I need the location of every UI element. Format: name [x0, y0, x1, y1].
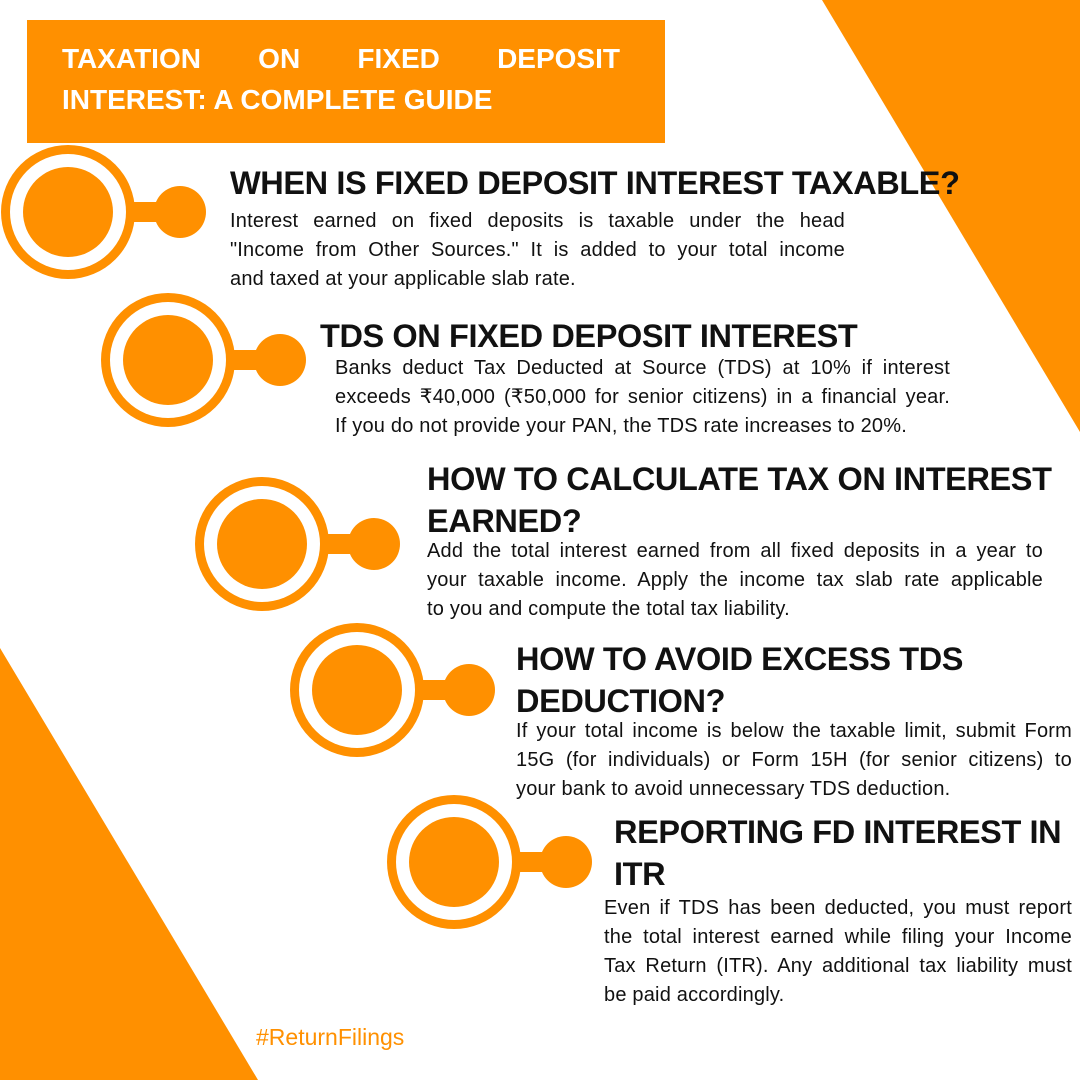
- section 3: [427, 461, 1052, 620]
- section 3: HOW TO CALCULATE TAX ON INTEREST: [427, 461, 1052, 497]
- section 2: exceeds ₹40,000 (₹50,000 for senior citizens) in a financial year.: [335, 386, 950, 408]
- section 4: your bank to avoid unnecessary TDS deduction.: [516, 778, 950, 800]
- section 5: ITR: [614, 856, 665, 892]
- section 5: REPORTING FD INTEREST IN: [614, 814, 1061, 850]
- hashtag: #ReturnFilings: [256, 1024, 404, 1050]
- section 5: [604, 814, 1072, 1006]
- section 1: "Income from Other Sources." It is added to your total income: [230, 239, 845, 261]
- section 3: to you and compute the total tax liability.: [427, 598, 790, 620]
- section 5: Even if TDS has been deducted, you must report: [604, 897, 1072, 919]
- section 2: If you do not provide your PAN, the TDS rate increases to 20%.: [335, 415, 907, 437]
- icon 2: [101, 293, 306, 427]
- section 1: and taxed at your applicable slab rate.: [230, 268, 576, 290]
- section 1: Interest earned on fixed deposits is taxable under the head: [230, 210, 845, 232]
- icon 5: [387, 795, 592, 929]
- title box: [27, 20, 665, 143]
- section 4: 15G (for individuals) or Form 15H (for senior citizens) to: [516, 749, 1072, 771]
- section 4: DEDUCTION?: [516, 683, 725, 719]
- icon 4: [290, 623, 495, 757]
- section 2: Banks deduct Tax Deducted at Source (TDS) at 10% if interest: [335, 357, 950, 379]
- section 2: TDS ON FIXED DEPOSIT INTEREST: [320, 318, 857, 354]
- title: TAXATION ON FIXED DEPOSIT: [62, 43, 620, 74]
- section 4: If your total income is below the taxable limit, submit Form: [516, 720, 1072, 742]
- section 3: EARNED?: [427, 503, 581, 539]
- section 2: [320, 318, 950, 437]
- section 1: [230, 165, 960, 290]
- title: [62, 43, 620, 115]
- section 5: be paid accordingly.: [604, 984, 784, 1006]
- section 1: WHEN IS FIXED DEPOSIT INTEREST TAXABLE?: [230, 165, 960, 201]
- icon 1: [1, 145, 206, 279]
- section 4: [516, 641, 1072, 800]
- section 5: the total interest earned while filing your Income: [604, 926, 1072, 948]
- section 5: Tax Return (ITR). Any additional tax liability must: [604, 955, 1072, 977]
- title: INTEREST: A COMPLETE GUIDE: [62, 84, 492, 115]
- section 3: Add the total interest earned from all fixed deposits in a year to: [427, 540, 1043, 562]
- section 4: HOW TO AVOID EXCESS TDS: [516, 641, 963, 677]
- section 3: your taxable income. Apply the income tax slab rate applicable: [427, 569, 1043, 591]
- icon 3: [195, 477, 400, 611]
